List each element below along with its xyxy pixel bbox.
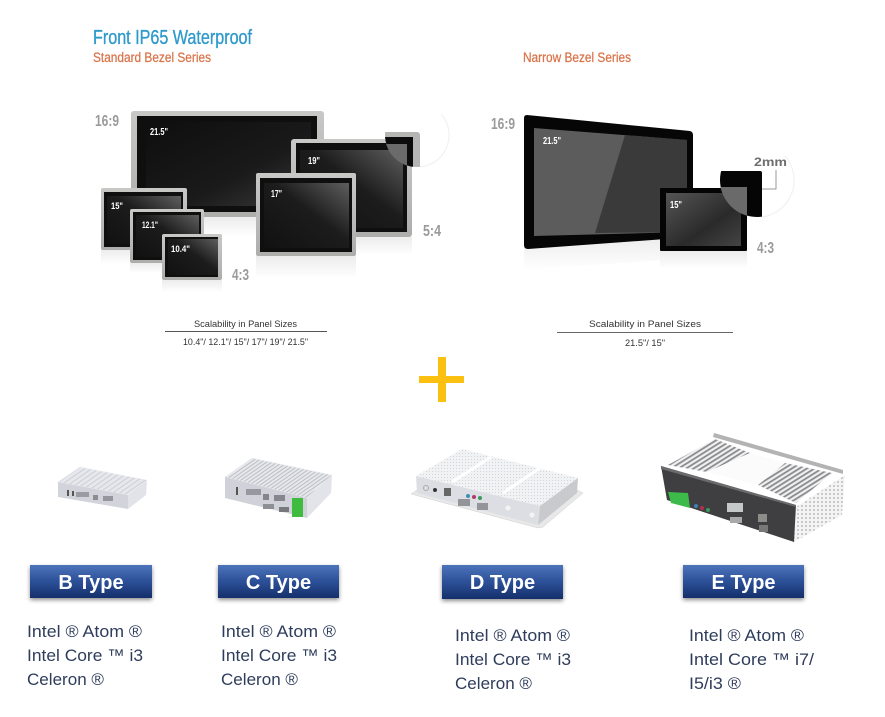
device: E type box <box>661 433 845 542</box>
monitor: 10.4 inch: 10.4" <box>171 244 190 255</box>
monitor: 17 inch: 17" <box>271 189 282 200</box>
label: 4:3 ratio: 4:3 <box>757 240 774 257</box>
button: C Type <box>218 565 339 598</box>
monitor: 15 inch narrow <box>660 188 747 269</box>
monitor: 17 inch <box>256 173 356 278</box>
device: C type box <box>225 458 332 518</box>
monitor: 19 inch: 19" <box>308 156 320 167</box>
caption: narrow panel sizes: Scalability in Panel Sizes <box>589 319 702 329</box>
caption: standard panel sizes <box>165 319 327 347</box>
monitor: 12.1 inch <box>130 209 204 273</box>
monitor: 12.1 inch: 12.1" <box>142 220 158 231</box>
button: B Type <box>30 565 152 598</box>
green terminal connector <box>668 492 690 508</box>
panel: standard bezel monitors <box>95 103 449 292</box>
monitor: 19 inch <box>291 139 412 255</box>
panel: narrow bezel monitors <box>491 115 794 270</box>
green terminal connector <box>292 498 303 517</box>
label: 16:9 ratio: 16:9 <box>95 113 119 130</box>
monitor: 21.5 inch <box>131 111 324 237</box>
text: C Type processors: Intel Core ™ i3 <box>221 646 337 665</box>
callout: 2mm bezel magnifier <box>720 156 794 218</box>
monitor: 21.5 inch narrow: 21.5" <box>543 136 561 147</box>
text: B Type processors: Intel Core ™ i3 <box>27 646 143 665</box>
button: B Type: B Type <box>58 572 124 594</box>
text: C Type processors: Intel ® Atom ® <box>221 622 336 641</box>
text: E Type processors: Intel Core ™ i7/ <box>689 650 814 669</box>
monitor: 21.5 inch narrow <box>524 115 693 270</box>
subheading: Narrow Bezel Series: Narrow Bezel Series <box>523 50 631 65</box>
device: D type box <box>411 449 583 528</box>
button: E Type <box>683 565 804 598</box>
label: 5:4 ratio: 5:4 <box>423 223 441 240</box>
button: D Type <box>442 565 563 599</box>
text: D Type processors: Intel Core ™ i3 <box>455 650 571 669</box>
text: E Type processors: Intel ® Atom ® <box>689 626 804 645</box>
caption: narrow panel sizes <box>557 319 733 348</box>
caption: standard panel sizes: 10.4"/ 12.1"/ 15"/ 17"/ 19"/ 21.5" <box>183 337 308 347</box>
text: D Type processors <box>455 626 571 693</box>
button: D Type: D Type <box>470 572 535 594</box>
icon: yellow plus sign <box>419 357 464 402</box>
button: E Type: E Type <box>711 572 776 594</box>
monitor: 15 inch <box>101 188 187 264</box>
monitor: 15 inch narrow: 15" <box>670 200 682 211</box>
callout: 2mm bezel magnifier: 2mm <box>754 155 787 169</box>
monitor: 21.5 inch: 21.5" <box>150 127 168 138</box>
subheading: Standard Bezel Series: Standard Bezel Series <box>93 50 211 65</box>
monitor: 10.4 inch <box>162 234 222 292</box>
text: B Type processors <box>27 622 143 689</box>
text: D Type processors: Celeron ® <box>455 674 532 693</box>
heading: Front IP65 Waterproof: Front IP65 Waterproof <box>93 27 252 49</box>
button: C Type: C Type <box>246 572 311 594</box>
label: 16:9 ratio: 16:9 <box>491 116 515 133</box>
caption: narrow panel sizes: 21.5"/ 15" <box>625 338 665 348</box>
text: C Type processors: Celeron ® <box>221 670 298 689</box>
text: D Type processors: Intel ® Atom ® <box>455 626 570 645</box>
label: 4:3 ratio: 4:3 <box>232 267 249 284</box>
text: E Type processors <box>689 626 814 693</box>
caption: standard panel sizes: Scalability in Panel Sizes <box>194 319 298 329</box>
monitor: 15 inch: 15" <box>111 201 123 212</box>
text: C Type processors <box>221 622 337 689</box>
text: B Type processors: Celeron ® <box>27 670 104 689</box>
text: E Type processors: I5/i3 ® <box>689 674 741 693</box>
callout: bezel corner magnifier <box>385 114 450 168</box>
text: B Type processors: Intel ® Atom ® <box>27 622 142 641</box>
device: B type box <box>58 467 147 509</box>
